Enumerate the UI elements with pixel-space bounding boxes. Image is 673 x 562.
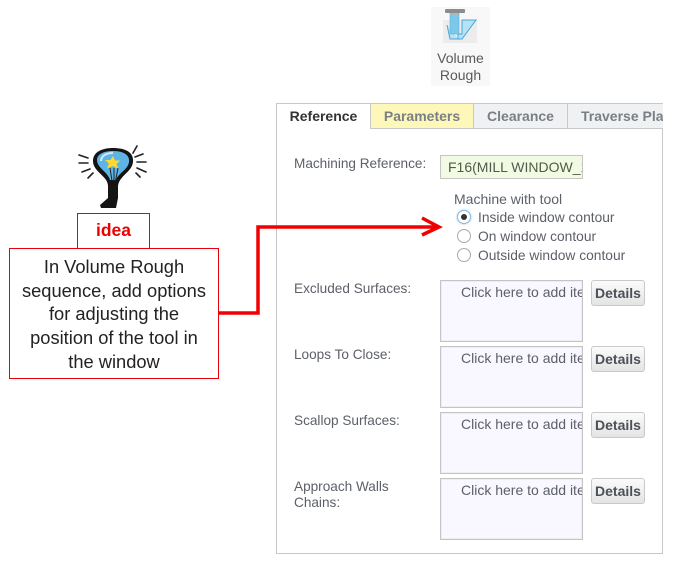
idea description box bbox=[9, 248, 219, 379]
tab: Clearance: Clearance bbox=[487, 108, 554, 124]
label: approach walls chains: Approach Walls bbox=[294, 479, 389, 494]
idea description box: In Volume Rough bbox=[44, 256, 184, 277]
radio: outside window contour bbox=[457, 248, 471, 262]
list: scallop surfaces bbox=[440, 412, 583, 474]
button: details 1 bbox=[591, 280, 645, 306]
tab: Parameters: Parameters bbox=[384, 108, 460, 124]
label: excluded surfaces: Excluded Surfaces: bbox=[294, 281, 411, 296]
idea heading box bbox=[77, 213, 150, 249]
button: details 4 bbox=[591, 478, 645, 504]
idea description box: the window bbox=[68, 351, 160, 372]
tab: Reference bbox=[276, 103, 371, 129]
label: scallop surfaces: Scallop Surfaces: bbox=[294, 413, 400, 428]
field: machining reference value bbox=[440, 155, 583, 179]
radio: inside window contour selected bbox=[457, 210, 471, 224]
button: details 2: Details bbox=[595, 351, 641, 367]
tab: Traverse Plane bbox=[567, 103, 663, 129]
radio label: on: On window contour bbox=[478, 229, 596, 244]
button: details 4: Details bbox=[595, 483, 641, 499]
button: details 2 bbox=[591, 346, 645, 372]
label: loops to close: Loops To Close: bbox=[294, 347, 391, 362]
list: loops to close bbox=[440, 346, 583, 408]
idea heading box: idea bbox=[96, 220, 131, 240]
tab: Parameters bbox=[370, 103, 474, 129]
list: excluded surfaces bbox=[440, 280, 583, 342]
button: details 3: Details bbox=[595, 417, 641, 433]
idea description box: position of the tool in bbox=[30, 327, 198, 348]
icon label: Volume Rough: Rough bbox=[440, 67, 481, 83]
radio label: inside: Inside window contour bbox=[478, 210, 615, 225]
label: approach walls chains: Chains: bbox=[294, 495, 340, 510]
icon label: Volume Rough: Volume bbox=[437, 50, 484, 66]
label: approach walls chains bbox=[294, 479, 389, 510]
tab: Clearance bbox=[473, 103, 568, 129]
icon: volume rough tool bbox=[431, 7, 490, 86]
tab: Reference: Reference bbox=[290, 108, 357, 124]
button: details 3 bbox=[591, 412, 645, 438]
button: details 1: Details bbox=[595, 285, 641, 301]
radio label: outside: Outside window contour bbox=[478, 248, 625, 263]
panel: reference dialog bbox=[276, 103, 663, 554]
idea description box: sequence, add options bbox=[22, 280, 206, 301]
label: machining reference: Machining Reference: bbox=[294, 156, 426, 171]
radio: on window contour bbox=[457, 229, 471, 243]
icon: walking light bulb bbox=[78, 145, 147, 208]
options heading: Machine with tool bbox=[454, 191, 562, 207]
idea description box: for adjusting the bbox=[49, 303, 179, 324]
list: approach walls chains bbox=[440, 478, 583, 540]
icon label: Volume Rough bbox=[437, 50, 484, 83]
